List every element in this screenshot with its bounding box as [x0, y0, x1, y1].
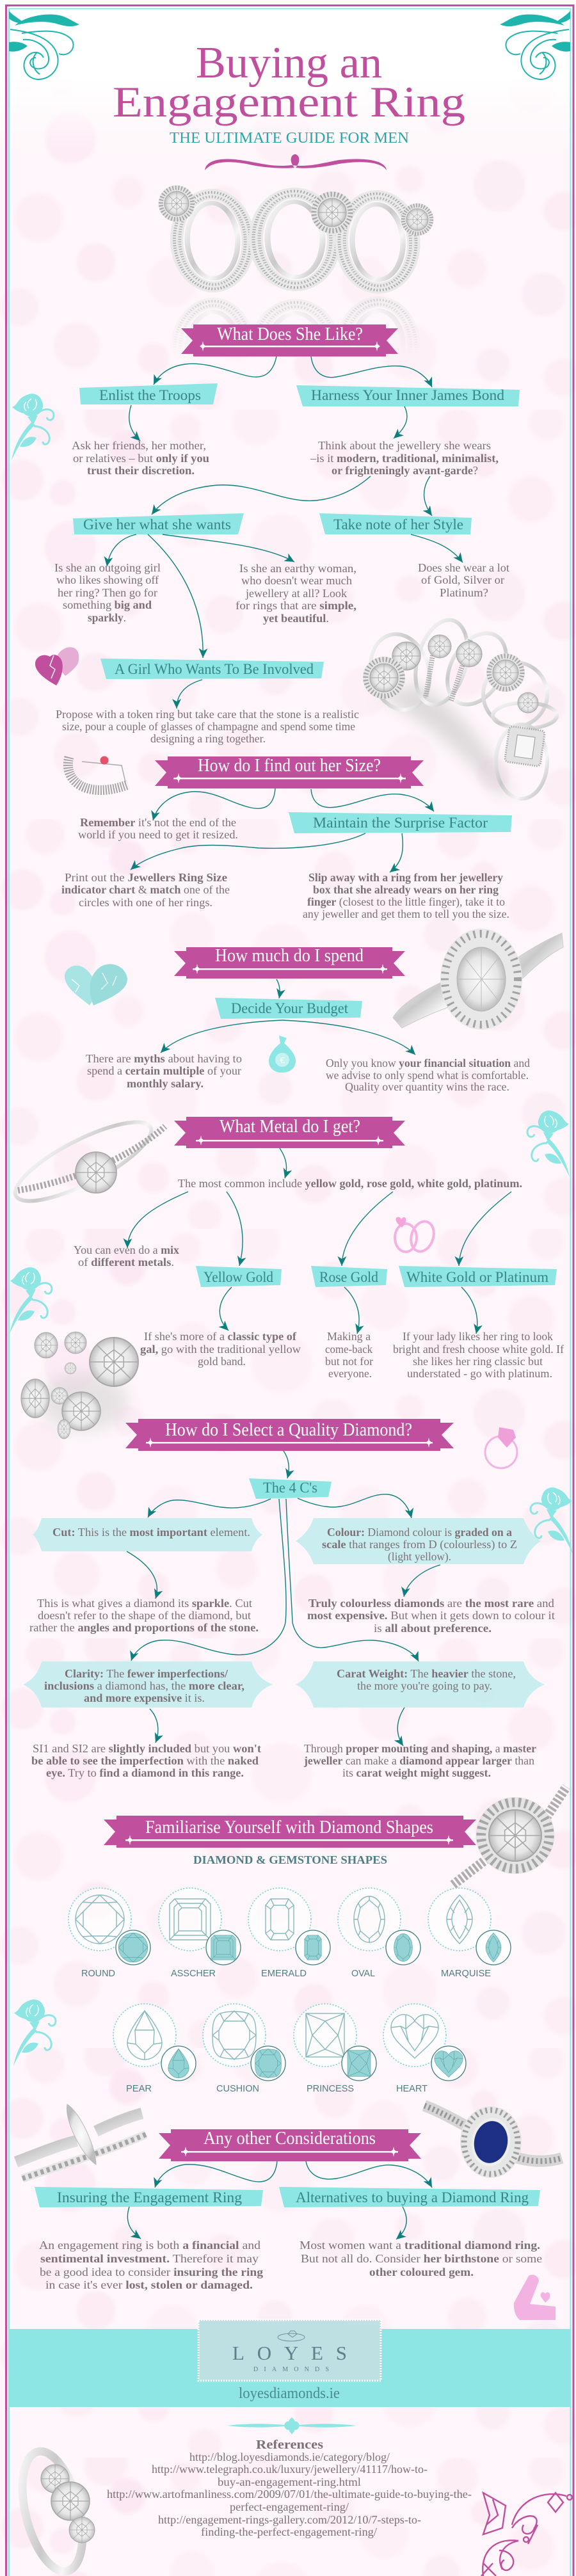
label: Insuring the Engagement Ring: Insuring the Engagement Ring — [57, 2189, 243, 2205]
text: slip away: box that she already wears on her ring — [313, 883, 499, 896]
text: SI1 and SI2: SI1 and SI2 are slightly included but you won't — [33, 1742, 261, 1755]
text: alternatives: But not all do. Consider her birthstone or some — [301, 2252, 542, 2265]
arrow — [282, 1020, 415, 1055]
text: insurance: An engagement ring is both a financial and — [39, 2239, 260, 2252]
references — [107, 2438, 472, 2538]
arrow — [397, 1708, 404, 1746]
banner: How much do I spend: How much do I spend — [215, 946, 364, 966]
arrow — [227, 1192, 243, 1266]
text: myths — [86, 1052, 242, 1090]
shape: cushion: CUSHION — [216, 2083, 259, 2094]
text: colourless: Truly colourless diamonds are the most rare and — [308, 1597, 554, 1610]
references: finding-the-perfect-engagement-ring/ — [201, 2525, 377, 2538]
label: A Girl Who Wants To Be Involved: A Girl Who Wants To Be Involved — [115, 661, 314, 677]
icon: ring box — [514, 2275, 556, 2320]
label: The 4 C's — [249, 1478, 332, 1499]
ribbon: Clarity: Clarity: The fewer imperfections/ — [65, 1667, 228, 1680]
shape: pear — [113, 2004, 196, 2094]
text: slip away: finger (closest to the little finger), take it to — [307, 895, 505, 909]
banner: How do I find out her Size? — [155, 756, 424, 788]
subtitle: THE ULTIMATE GUIDE FOR MEN — [170, 130, 409, 147]
arrow — [461, 1287, 477, 1334]
text: financial situation: Quality over quantity wins the race. — [345, 1080, 509, 1093]
arrow — [306, 2161, 432, 2188]
text: insurance — [39, 2239, 263, 2291]
references: perfect-engagement-ring/ — [230, 2500, 349, 2513]
text: rose gold: everyone. — [328, 1367, 372, 1380]
arrow — [127, 1192, 188, 1248]
label: Rose Gold: Rose Gold — [319, 1269, 378, 1285]
ribbon: Carat Weight: Carat Weight: The heavier the stone, — [337, 1667, 516, 1680]
arrow — [311, 789, 434, 812]
arrow — [298, 1494, 412, 1518]
text: ask her friends: trust their discretion. — [87, 464, 195, 477]
text: rose gold: but not for — [325, 1355, 373, 1368]
arrow — [344, 1287, 359, 1334]
icon: rose — [12, 394, 54, 460]
photo: ring cluster — [362, 614, 557, 799]
text: white gold: understated - go with platinum. — [407, 1367, 552, 1380]
banner: How do I find out her Size?: How do I find out her Size? — [198, 756, 381, 776]
text: proper mounting: Through proper mounting and shaping, a master — [304, 1742, 536, 1755]
ribbon: Colour: scale that ranges from D (colourless) to Z — [322, 1538, 517, 1551]
text: myths: spend a certain multiple of your — [87, 1064, 241, 1077]
references: http://www.telegraph.co.uk/luxury/jewellery/41117/how-to- — [152, 2463, 428, 2476]
arrow — [148, 534, 203, 658]
banner: What Does She Like? — [181, 324, 398, 356]
banner: What Metal do I get?: What Metal do I get? — [220, 1117, 360, 1137]
label: Decide Your Budget: Decide Your Budget — [231, 1000, 349, 1016]
label: Rose Gold — [311, 1266, 387, 1287]
icon: money bag: € — [280, 1056, 284, 1066]
arrow — [161, 1020, 282, 1053]
banner: Familiarise Yourself with Diamond Shapes — [104, 1816, 476, 1848]
text: gold silver platinum: of Gold, Silver or — [421, 573, 504, 586]
text: financial situation — [326, 1057, 530, 1093]
label: Take note of her Style — [319, 513, 472, 534]
shape: heart — [383, 2004, 466, 2094]
text: think about the jewellery — [310, 439, 499, 477]
ribbon: Clarity — [23, 1661, 273, 1708]
text: alternatives — [300, 2239, 542, 2278]
text: gold silver platinum: Platinum? — [440, 586, 488, 599]
text: sparkle: This is what gives a diamond its sparkle. Cut — [37, 1597, 252, 1610]
label: Enlist the Troops: Enlist the Troops — [99, 387, 201, 403]
arrow — [163, 534, 294, 562]
ribbon: Colour — [296, 1518, 541, 1564]
text: print out: circles with one of her rings. — [79, 896, 212, 909]
text: white gold: bright and fresh choose white gold. If — [393, 1343, 564, 1356]
label: Yellow Gold: Yellow Gold — [204, 1269, 273, 1285]
photo: solitaire ring — [6, 1108, 165, 1215]
banner: How do I Select a Quality Diamond?: How do I Select a Quality Diamond? — [165, 1420, 412, 1440]
text: yellow gold: gal, go with the traditional yellow — [140, 1343, 301, 1356]
arrow — [131, 1499, 286, 1661]
banner: What Metal do I get? — [174, 1117, 405, 1148]
ribbon: Colour: Colour: Diamond colour is graded on a — [327, 1526, 512, 1539]
icon: corner ornament top right — [500, 11, 570, 79]
text: sparkle: rather the angles and proportions of the stone. — [29, 1621, 259, 1634]
text: print out — [61, 871, 230, 909]
text: slip away: Slip away with a ring from her jewellery — [308, 871, 503, 884]
text: think about the jewellery: Think about the jewellery she wears — [318, 439, 491, 452]
text: token ring: size, pour a couple of glasses of champagne and spend some time — [62, 720, 355, 733]
text: earthy woman: jewellery at all? Look — [245, 587, 347, 600]
subheading: Diamond & gemstone shapes: DIAMOND & GEMSTONE SHAPES — [193, 1853, 387, 1866]
text: earthy woman: for rings that are simple, — [236, 599, 356, 612]
label: Alternatives to buying a Diamond Ring — [279, 2187, 540, 2207]
label: Give her what she wants: Give her what she wants — [83, 516, 231, 532]
banner: How much do I spend — [174, 946, 405, 979]
label: Decide Your Budget — [215, 998, 362, 1019]
text: remember: Remember it's not the end of the — [80, 816, 236, 829]
shape: oval: OVAL — [351, 1968, 375, 1979]
label: Maintain the Surprise Factor — [289, 812, 512, 833]
text: yellow gold — [140, 1330, 301, 1368]
shape: round: ROUND — [81, 1968, 115, 1979]
icon: teal broken hearts — [65, 964, 127, 1005]
label: Yellow Gold — [196, 1266, 282, 1287]
text: earthy woman: who doesn't wear much — [241, 574, 352, 587]
text: mix of metals — [74, 1244, 179, 1268]
label: Insuring the Engagement Ring — [35, 2187, 263, 2207]
icon: diamond ring outline — [485, 1427, 517, 1468]
text: earthy woman: yet beautiful. — [263, 612, 329, 625]
text: gold silver platinum: Does she wear a lot — [418, 561, 509, 574]
banner: How do I Select a Quality Diamond? — [125, 1419, 454, 1451]
text: myths: monthly salary. — [127, 1077, 204, 1090]
text: outgoing girl: Is she an outgoing girl — [54, 561, 161, 574]
text: earthy woman — [236, 562, 356, 625]
title: Engagement Ring — [113, 77, 465, 126]
arrow — [177, 680, 202, 708]
text: most common metals: The most common include yellow gold, rose gold, white gold, platinum. — [178, 1177, 522, 1190]
logo panel: DIAMONDS — [253, 2366, 329, 2373]
text: token ring: designing a ring together. — [150, 732, 266, 745]
shape: asscher — [159, 1888, 241, 1979]
references: http://engagement-rings-gallery.com/2012/10/7-steps-to- — [158, 2513, 421, 2526]
title — [113, 38, 465, 126]
text: outgoing girl — [54, 561, 161, 624]
text: colourless: is all about preference. — [374, 1622, 492, 1635]
text: SI1 and SI2: be able to see the imperfection with the naked — [31, 1754, 259, 1767]
text: outgoing girl: who likes showing off — [56, 573, 159, 586]
label: Take note of her Style: Take note of her Style — [333, 516, 463, 532]
text: colourless — [307, 1597, 555, 1635]
shape: emerald: EMERALD — [261, 1968, 307, 1979]
text: rose gold: come-back — [325, 1343, 372, 1356]
ribbon: Cut: Cut: This is the most important element. — [52, 1526, 250, 1539]
arrow — [394, 406, 407, 438]
text: yellow gold: gold band. — [198, 1355, 246, 1368]
label: Alternatives to buying a Diamond Ring: Alternatives to buying a Diamond Ring — [296, 2189, 529, 2205]
arrow — [311, 356, 432, 387]
text: SI1 and SI2 — [31, 1742, 261, 1779]
arrow — [390, 833, 403, 872]
text: sparkle: doesn't refer to the shape of the diamond, but — [38, 1609, 251, 1622]
arrow — [148, 1499, 271, 1517]
icon: rose — [527, 1110, 570, 1177]
banner: What Does She Like?: What Does She Like? — [217, 324, 363, 344]
ribbon: Clarity: inclusions a diamond has, the more clear, — [44, 1679, 244, 1692]
text: remember — [78, 816, 238, 841]
banner: Familiarise Yourself with Diamond Shapes: Familiarise Yourself with Diamond Shapes — [145, 1818, 433, 1837]
ribbon: Carat Weight: the more you're going to pay. — [357, 1679, 492, 1692]
icon: money bag — [269, 1036, 296, 1073]
text: rose gold: Making a — [327, 1330, 371, 1343]
arrow — [459, 1192, 511, 1266]
label: White Gold or Platinum: White Gold or Platinum — [406, 1269, 548, 1285]
footer band — [9, 2329, 570, 2407]
ornament: bottom right — [481, 2493, 572, 2576]
references: http://www.artofmanliness.com/2009/07/01/the-ultimate-guide-to-buying-the- — [107, 2488, 472, 2500]
photo: three stone ring — [12, 2445, 95, 2576]
ornament — [227, 2417, 356, 2435]
label: Give her what she wants — [73, 513, 244, 534]
shape: asscher: ASSCHER — [171, 1968, 216, 1979]
website: loyesdiamonds.ie — [239, 2385, 340, 2402]
arrow — [424, 476, 432, 516]
label: Harness Your Inner James Bond — [296, 385, 520, 406]
text: proper mounting — [303, 1742, 536, 1779]
icon: linked rings with heart — [395, 1217, 438, 1254]
references: buy-an-engagement-ring.html — [218, 2476, 361, 2488]
title: Buying an — [196, 38, 382, 88]
text: outgoing girl: her ring? Then go for — [58, 586, 157, 599]
text: slip away — [303, 871, 509, 920]
photo: loose diamonds — [21, 1332, 138, 1439]
references: References — [256, 2438, 323, 2452]
icon: corner ornament top left — [9, 11, 79, 79]
photo: ring reflection — [173, 296, 417, 345]
shape: round — [68, 1888, 150, 1979]
text: outgoing girl: sparkly. — [88, 611, 126, 624]
text: white gold — [393, 1330, 564, 1380]
text: insurance: in case it's ever lost, stolen or damaged. — [45, 2278, 253, 2291]
banner: Any other Considerations — [159, 2129, 421, 2161]
text: outgoing girl: something big and — [63, 598, 152, 611]
shape: oval — [338, 1888, 420, 1979]
text: ask her friends — [72, 439, 209, 477]
text: financial situation: Only you know your financial situation and — [326, 1057, 530, 1069]
text: slip away: any jeweller and get them to tell you the size. — [303, 908, 509, 920]
text: earthy woman: Is she an earthy woman, — [239, 562, 356, 575]
photo: oval halo ring — [393, 929, 563, 1030]
arrow — [276, 979, 280, 998]
ribbon: Colour: (light yellow). — [388, 1550, 451, 1564]
icon: rose — [13, 1999, 56, 2066]
ribbon: Cut — [33, 1518, 262, 1551]
shape: marquise: MARQUISE — [441, 1968, 491, 1979]
label: The 4 C's: The 4 C's — [263, 1480, 317, 1496]
text: myths: There are myths about having to — [86, 1052, 242, 1065]
arrow — [404, 1565, 440, 1597]
flourish under title — [205, 154, 387, 170]
text: print out: indicator chart & match one of the — [61, 883, 230, 896]
label: Harness Your Inner James Bond: Harness Your Inner James Bond — [311, 387, 505, 403]
shape: princess — [294, 2004, 376, 2094]
text: SI1 and SI2: eye. Try to find a diamond in this range. — [46, 1766, 244, 1779]
label: Maintain the Surprise Factor: Maintain the Surprise Factor — [313, 815, 488, 831]
text: ask her friends: or relatives – but only if you — [73, 452, 209, 465]
arrow — [153, 788, 275, 820]
photo: sapphire ring — [424, 2106, 562, 2178]
text: alternatives: other coloured gem. — [369, 2266, 474, 2278]
shape: princess: PRINCESS — [307, 2083, 354, 2094]
text: mix of metals: of different metals. — [78, 1256, 174, 1268]
photo: halo ring — [453, 1787, 566, 1885]
shape: marquise — [428, 1888, 511, 1979]
text: think about the jewellery: or frighteningly avant-garde? — [332, 464, 478, 477]
arrow — [284, 1451, 289, 1478]
text: gold silver platinum — [418, 561, 509, 599]
text: financial situation: we advise to only spend what is comfortable. — [326, 1069, 529, 1082]
references: http://blog.loyesdiamonds.ie/category/blog/ — [189, 2451, 390, 2463]
label: White Gold or Platinum — [399, 1266, 557, 1287]
label: Enlist the Troops — [79, 383, 218, 404]
text: white gold: If your lady likes her ring to look — [403, 1330, 553, 1343]
logo panel — [198, 2320, 381, 2381]
text: white gold: she likes her ring classic but — [413, 1355, 543, 1368]
arrow — [152, 476, 371, 515]
arrow — [280, 1148, 287, 1178]
icon: logo ring — [278, 2331, 305, 2341]
text: proper mounting: jeweller can make a diamond appear larger than — [303, 1754, 534, 1767]
text: print out: Print out the Jewellers Ring Size — [65, 871, 227, 884]
text: sparkle — [29, 1597, 259, 1634]
shape: cushion — [203, 2004, 285, 2094]
text: think about the jewellery: –is it modern, traditional, minimalist, — [310, 452, 499, 465]
photo: three diamond rings — [159, 186, 434, 292]
text: insurance: be a good idea to consider insuring the ring — [40, 2266, 263, 2278]
text: proper mounting: its carat weight might suggest. — [342, 1766, 491, 1779]
text: colourless: most expensive. But when it gets down to colour it — [307, 1609, 555, 1622]
text: remember: world if you need to get it resized. — [78, 828, 238, 841]
shape: emerald — [248, 1888, 330, 1979]
arrow — [127, 2207, 141, 2239]
shape: heart: HEART — [396, 2083, 428, 2094]
banner: Any other Considerations: Any other Considerations — [204, 2129, 376, 2148]
arrow — [107, 534, 136, 566]
icon: hearts — [35, 647, 79, 685]
photo: marquise ring set — [16, 2104, 146, 2179]
arrow — [411, 534, 463, 563]
arrow — [286, 1499, 419, 1661]
arrow — [155, 2161, 277, 2188]
text: alternatives: Most women want a traditional diamond ring. — [300, 2239, 540, 2252]
shape: pear: PEAR — [126, 2083, 152, 2094]
text: token ring: Propose with a token ring but take care that the stone is a realistic — [56, 708, 359, 721]
ribbon: Clarity: and more expensive it is. — [84, 1692, 205, 1704]
text: ask her friends: Ask her friends, her mother, — [72, 439, 206, 452]
logo panel: LOYES — [232, 2342, 347, 2364]
ribbon: Carat Weight — [296, 1661, 545, 1708]
arrow — [127, 1551, 157, 1599]
icon: ring sizer — [68, 756, 128, 790]
text: insurance: sentimental investment. Therefore it may — [40, 2252, 259, 2265]
arrow — [220, 1287, 232, 1331]
icon: rose — [10, 1267, 52, 1334]
text: mix of metals: You can even do a mix — [74, 1244, 179, 1256]
text: yellow gold: If she's more of a classic type of — [144, 1330, 297, 1343]
arrow — [129, 405, 140, 441]
arrow — [154, 356, 276, 385]
arrow — [131, 833, 365, 870]
text: rose gold — [325, 1330, 373, 1380]
arrow — [150, 1709, 158, 1743]
arrow — [342, 1192, 393, 1266]
icon: rose — [531, 1487, 573, 1554]
arrow — [396, 2207, 406, 2239]
text: token ring — [56, 708, 359, 745]
